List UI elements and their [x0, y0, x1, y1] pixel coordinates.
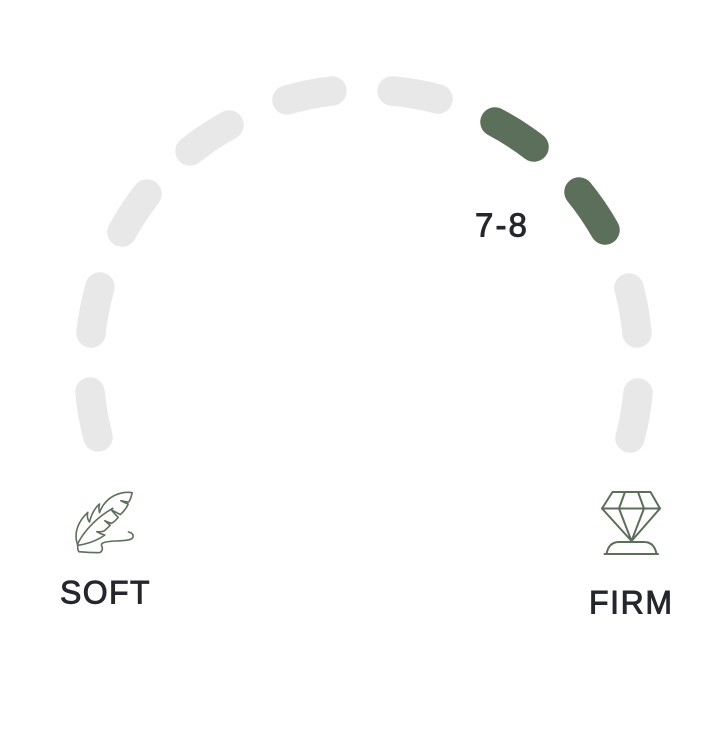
icon: feather [76, 492, 133, 553]
gauge inactive segments [90, 91, 638, 438]
label: firm: FIRM [589, 584, 674, 620]
label: soft: SOFT [60, 574, 151, 610]
gauge active segments [495, 122, 605, 230]
value label: 7-8 [475, 206, 529, 244]
icon: diamond [602, 492, 660, 554]
